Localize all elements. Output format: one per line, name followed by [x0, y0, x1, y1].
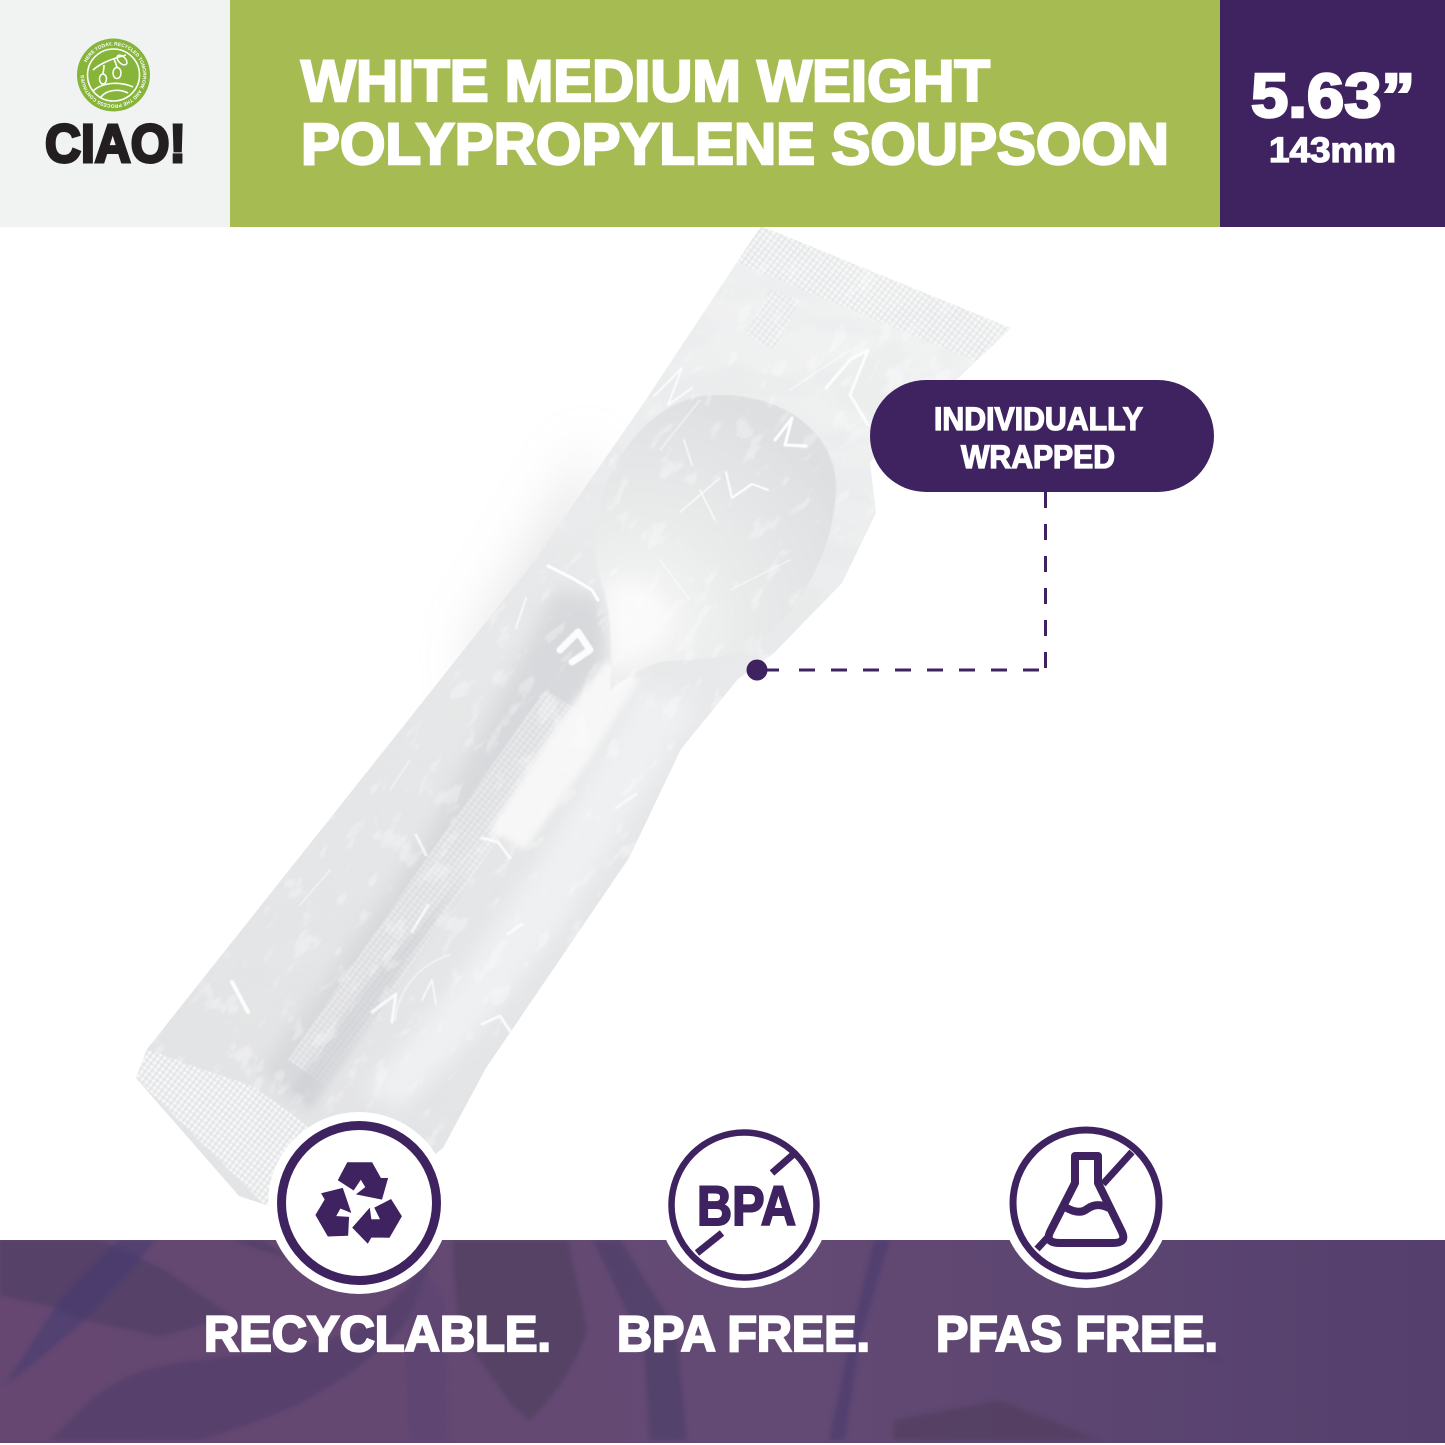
product photo: individually wrapped soup spoon [136, 227, 1011, 1206]
callout: individually wrapped: WRAPPED [961, 439, 1115, 475]
title panel: POLYPROPYLENE SOUPSOON [301, 112, 1169, 177]
wrapper crinkle highlights [232, 300, 868, 1034]
icon: flask crossed out [1037, 1152, 1132, 1249]
title panel [230, 0, 1220, 227]
label: PFAS free: PFAS FREE. [936, 1306, 1218, 1362]
bottom seal of wrapper [136, 1050, 308, 1206]
logo: round olive badge: HERE TODAY, RECYCLED TOMORROW, AND THE PROCESS CONTINUES [80, 42, 146, 108]
title panel: WHITE MEDIUM WEIGHT [301, 49, 990, 114]
callout: individually wrapped [870, 380, 1214, 492]
label: BPA free: BPA FREE. [617, 1306, 870, 1362]
bottom banner [0, 1240, 1445, 1443]
logo wordmark: CIAO! [45, 114, 186, 174]
callout: individually wrapped: INDIVIDUALLY [934, 401, 1143, 437]
spoon bowl [595, 395, 836, 690]
top seal of wrapper [735, 226, 1011, 365]
logo panel [0, 0, 230, 227]
wrapper shading [100, 227, 1040, 1237]
size panel [1220, 0, 1445, 227]
badge: BPA free [658, 1122, 830, 1288]
icon: BPA crossed out: BPA [697, 1174, 796, 1237]
wrapper crinkle texture [158, 396, 816, 1144]
label: recyclable: RECYCLABLE. [204, 1306, 551, 1362]
badge: PFAS free [1001, 1118, 1171, 1288]
callout leader line [746, 492, 1046, 680]
size panel: 143mm [1269, 131, 1396, 170]
badge: recyclable [268, 1112, 450, 1294]
header bar [0, 0, 1445, 227]
spoon handle [271, 593, 664, 1107]
size panel: 5.63” [1251, 62, 1415, 131]
icon: recycle arrows [309, 1163, 405, 1250]
